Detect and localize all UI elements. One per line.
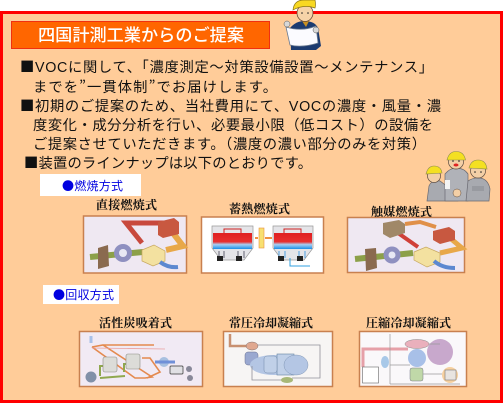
text block: proposal points: ■VOCに関して、「濃度測定～対策設備設置～メンテナンス」 bbox=[20, 56, 433, 77]
diagram: regenerative combustion bbox=[202, 217, 324, 273]
heading: activated carbon adsorption: 活性炭吸着式 bbox=[99, 314, 172, 331]
diagram: compression cooling condensation bbox=[360, 332, 466, 386]
heading: atmospheric cooling condensation: 常圧冷却凝縮式 bbox=[229, 314, 313, 331]
diagram: activated carbon adsorption bbox=[80, 332, 202, 386]
icon: engineer holding a plan bbox=[284, 0, 321, 50]
heading: catalytic combustion: 触媒燃焼式 bbox=[371, 203, 432, 220]
diagram: direct combustion bbox=[84, 216, 186, 273]
text block: proposal points: 度変化・成分分析を行い、必要最小限（低コスト）の設備を bbox=[33, 114, 433, 135]
icon: three workers shaking hands bbox=[426, 152, 490, 201]
label: combustion methods: ●燃焼方式 bbox=[62, 177, 123, 194]
text block: proposal points: ご提案させていただきます。（濃度の濃い部分のみを対策） bbox=[33, 133, 426, 154]
diagram: catalytic combustion bbox=[348, 218, 464, 272]
text block: proposal points: ■初期のご提案のため、当社費用にて、VOCの濃度・風量・濃 bbox=[20, 95, 441, 116]
text block: proposal points: ■装置のラインナップは以下のとおりです。 bbox=[24, 152, 312, 173]
heading: compression cooling condensation: 圧縮冷却凝縮式 bbox=[366, 314, 451, 331]
heading: regenerative combustion: 蓄熱燃焼式 bbox=[229, 200, 290, 217]
heading: title banner: 四国計測工業からのご提案 bbox=[38, 21, 244, 46]
diagram: atmospheric cooling condensation bbox=[224, 332, 332, 386]
text block: proposal points bbox=[20, 56, 441, 173]
label: combustion methods bbox=[40, 174, 141, 196]
text block: proposal points: までを”一貫体制”でお届けします。 bbox=[33, 76, 277, 97]
label: recovery methods: ●回収方式 bbox=[53, 286, 114, 303]
heading: direct combustion: 直接燃焼式 bbox=[96, 196, 157, 213]
